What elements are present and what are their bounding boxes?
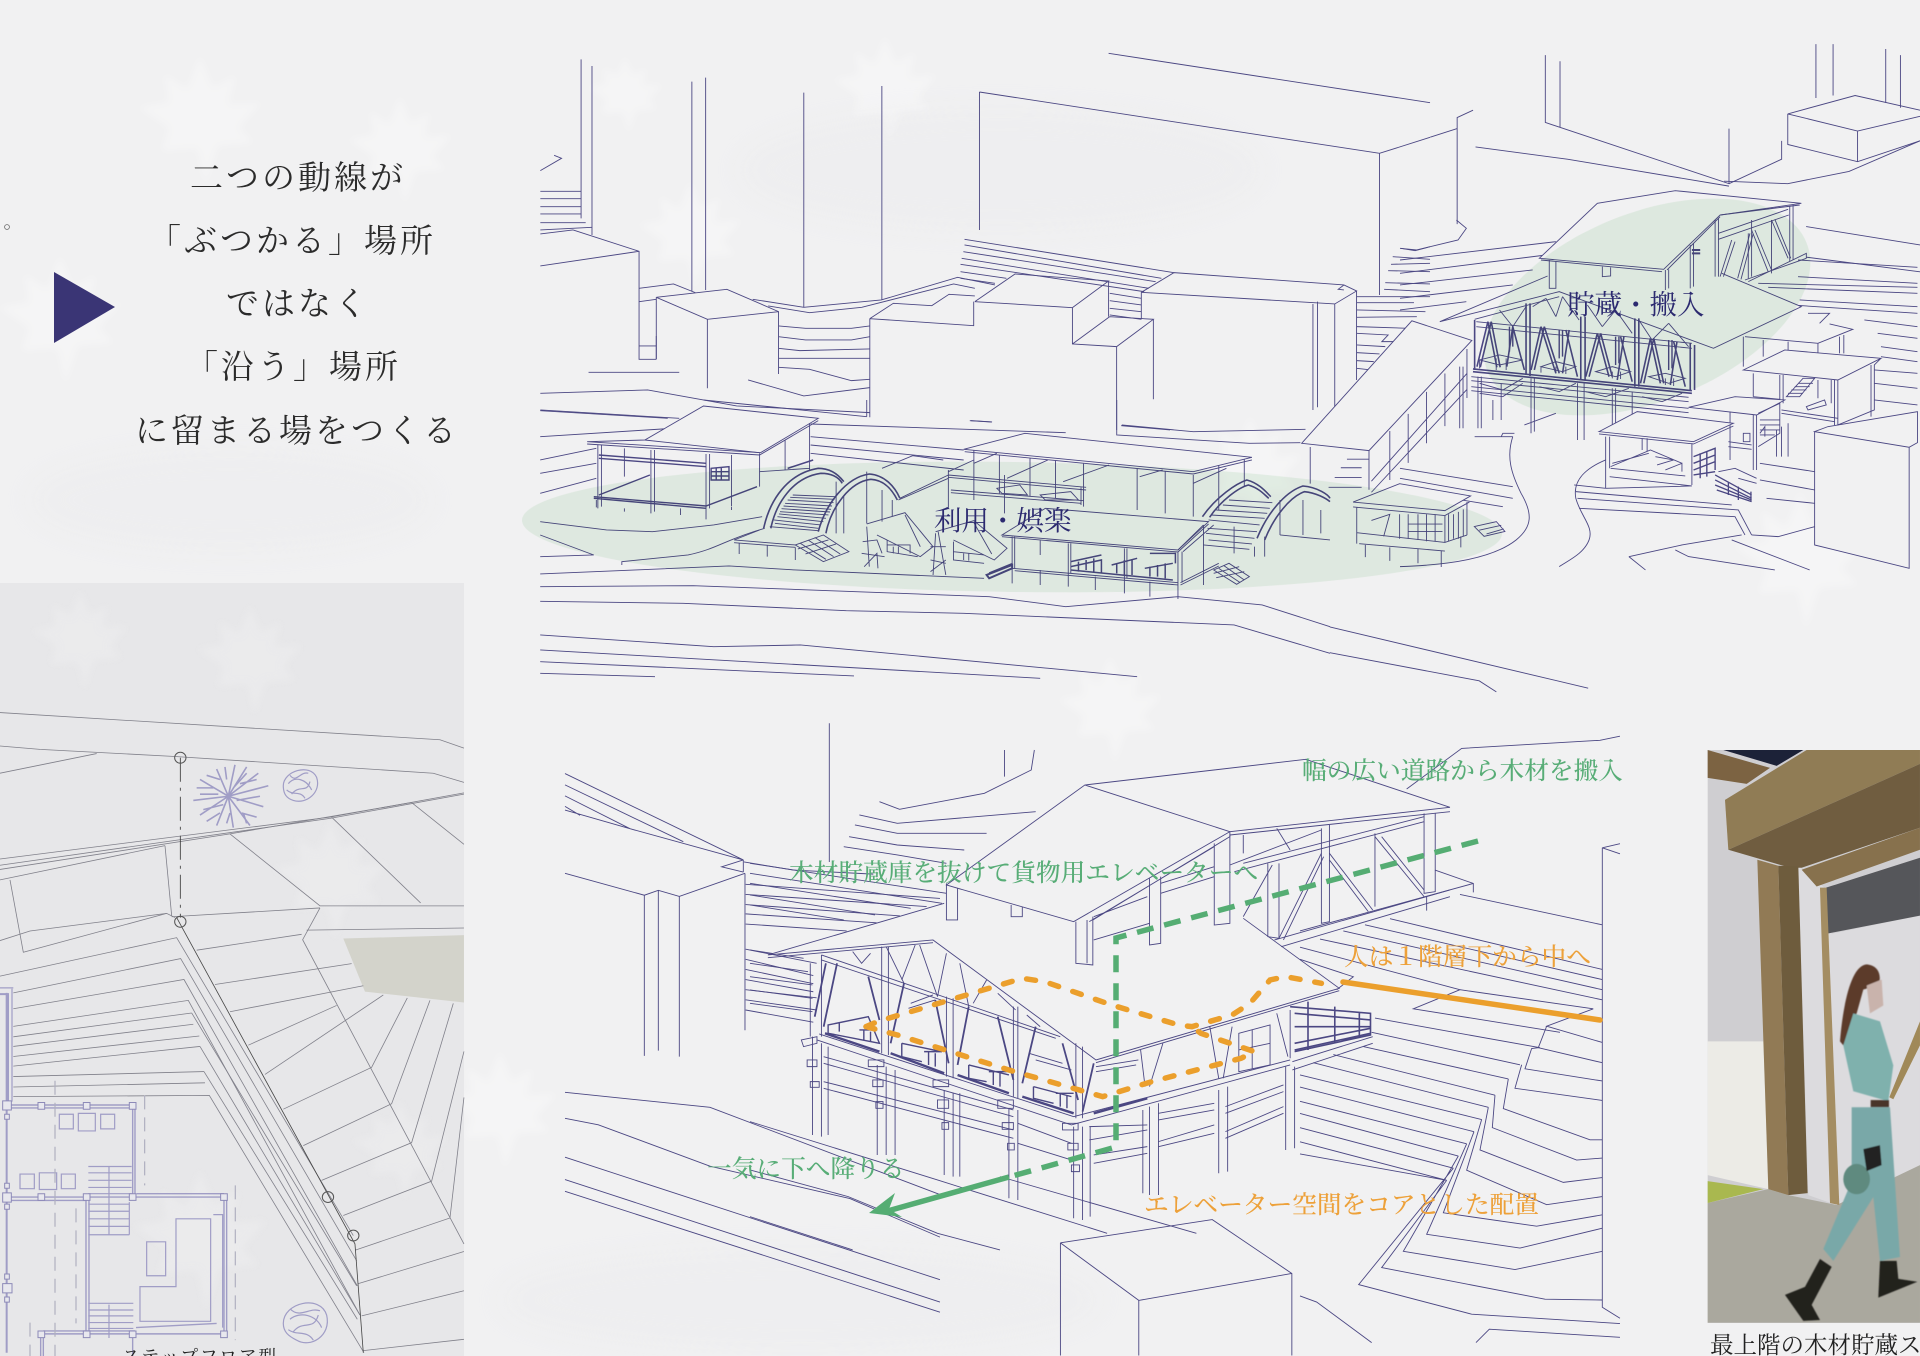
main building bbox=[750, 750, 1450, 1250]
upper structure bbox=[946, 813, 1450, 965]
pavilion: left structure bbox=[587, 421, 818, 519]
title: 「ぶつかる」場所 bbox=[148, 215, 436, 262]
annex: stair block bbox=[1743, 313, 1853, 367]
annotations bbox=[707, 752, 1623, 1221]
plan: tree symbols bbox=[193, 765, 327, 1343]
photo floor bbox=[1708, 1165, 1920, 1323]
title: 「沿う」場所 bbox=[185, 341, 401, 388]
annex: upper room structure bbox=[1753, 365, 1871, 425]
photo lower beam bbox=[1802, 828, 1920, 886]
lower roof structure bbox=[810, 945, 1290, 1118]
axonometric drawing: upper site bbox=[540, 44, 1920, 692]
worker legs bbox=[1823, 1107, 1900, 1261]
annex: lower room bbox=[1599, 412, 1733, 442]
small pavilion walls bbox=[1353, 502, 1505, 567]
lower left context bbox=[565, 723, 940, 1312]
furniture bbox=[825, 995, 1147, 1113]
right bridges bbox=[1202, 480, 1330, 540]
lower roof fill bbox=[768, 903, 1339, 1060]
annotation: wide road: 幅の広い道路から木材を搬入 bbox=[1302, 752, 1623, 787]
pavilion: left roof bbox=[587, 406, 818, 453]
plan leaf texture bbox=[32, 590, 448, 1310]
photo post shade bbox=[1778, 866, 1808, 1195]
photo back wall bbox=[1798, 866, 1920, 1205]
huts bbox=[862, 513, 1007, 575]
photo back beam bbox=[1708, 750, 1770, 784]
upper context buildings bbox=[540, 53, 1430, 430]
worker boots bbox=[1785, 1259, 1832, 1321]
plan: axis markers bbox=[175, 752, 359, 1241]
right bridge stairs bbox=[1203, 500, 1330, 557]
route arrow head bbox=[869, 1193, 902, 1217]
route: people line (orange dashed) bbox=[866, 977, 1321, 1097]
photo big beam underside bbox=[1728, 764, 1920, 868]
balcony railing bbox=[1290, 1002, 1370, 1052]
deck and floors bbox=[812, 1034, 1373, 1220]
label: storage and delivery: 貯蔵・搬入 bbox=[1567, 282, 1704, 322]
photo brace bbox=[1889, 1021, 1920, 1099]
annotation: people entry: 人は１階層下から中へ bbox=[1344, 938, 1591, 973]
timber route arrow bbox=[884, 1177, 1009, 1212]
title: 二つの動線が bbox=[190, 152, 406, 199]
photo dark sky bbox=[1723, 750, 1803, 766]
storage furniture bbox=[1480, 327, 1685, 386]
upper roof detail bbox=[1085, 785, 1450, 837]
photo big beam top bbox=[1725, 750, 1920, 850]
route: timber line (green dashed) bbox=[884, 841, 1478, 1212]
photo shutter bbox=[1826, 858, 1920, 934]
storage thin structure bbox=[1460, 297, 1692, 440]
road edges and terraces bbox=[1400, 220, 1917, 570]
title: ではなく bbox=[226, 278, 370, 325]
upper roof bbox=[946, 759, 1450, 922]
right context bbox=[1330, 44, 1920, 692]
pavilion: right lower structure bbox=[987, 524, 1249, 599]
small pavilion bbox=[1353, 484, 1505, 567]
timber route dashes bbox=[1009, 841, 1478, 1177]
orange lower path bbox=[866, 1027, 1254, 1097]
storage upper roof bbox=[1539, 191, 1801, 269]
bridge stairs bbox=[734, 456, 948, 562]
bridge roof bbox=[1302, 321, 1472, 451]
triangle arrow bbox=[54, 272, 115, 343]
orange upper path bbox=[866, 977, 1321, 1027]
column joints bbox=[801, 1037, 1079, 1172]
annex: middle room structure bbox=[1728, 403, 1788, 470]
plan: contour lines bbox=[0, 713, 464, 1353]
context lines behind building bbox=[750, 750, 1196, 1250]
plan background bbox=[0, 583, 464, 1356]
route: people entry line bbox=[1343, 982, 1600, 1020]
title bbox=[135, 152, 459, 452]
annotation: go down: 一気に下へ降りる bbox=[707, 1150, 905, 1185]
annex: middle room bbox=[1689, 397, 1785, 415]
label: use and leisure: 利用・娯楽 bbox=[934, 498, 1072, 538]
title: に留まる場をつくる bbox=[135, 405, 459, 452]
bridge structure bbox=[1310, 349, 1467, 492]
annex: lower room structure bbox=[1599, 426, 1757, 502]
storage upper roof edge bbox=[1541, 205, 1800, 272]
annex: upper room bbox=[1743, 350, 1881, 425]
storage truss bays bbox=[1473, 303, 1695, 393]
building row: use and leisure bbox=[540, 400, 1330, 678]
lower block bbox=[1060, 1220, 1292, 1356]
axonometric drawing: lower building bbox=[565, 723, 1620, 1356]
plan: column markers bbox=[3, 1101, 227, 1338]
photo walking worker bbox=[1785, 964, 1917, 1321]
photo lawn bbox=[1708, 1181, 1763, 1203]
plan: building outline bbox=[0, 988, 235, 1356]
small pavilion roof bbox=[1353, 484, 1471, 511]
worker face bbox=[1867, 980, 1883, 1013]
photo wall bbox=[1708, 750, 1920, 1323]
annotation: elevator core: エレベーター空間をコアとした配置 bbox=[1144, 1186, 1539, 1221]
photo post bbox=[1757, 860, 1788, 1195]
right context terraces bbox=[1300, 736, 1620, 1343]
worker belt bbox=[1871, 1100, 1889, 1107]
green zone: storage bbox=[1452, 155, 1842, 459]
pavilion: right upper roof bbox=[964, 433, 1252, 472]
worker torso bbox=[1843, 1013, 1893, 1101]
terrain lines bbox=[540, 400, 1330, 678]
panel: site plan bbox=[0, 583, 464, 1356]
photo: top floor timber storage bbox=[1708, 750, 1920, 1323]
plan drawing bbox=[0, 713, 464, 1356]
green zone: use and leisure bbox=[521, 455, 1503, 599]
photo lower wall bbox=[1708, 1041, 1768, 1189]
storage lower roof fill bbox=[1440, 273, 1801, 348]
storage lower roof edges bbox=[1440, 273, 1801, 348]
right box bbox=[1815, 412, 1917, 568]
pavilion: right lower roof bbox=[1002, 508, 1209, 550]
bridge arches bbox=[764, 460, 900, 533]
annotation: through storage: 木材貯蔵庫を抜けて貨物用エレベーターへ bbox=[789, 854, 1258, 889]
worker hair bbox=[1840, 964, 1880, 1045]
pavilion: right upper structure bbox=[948, 450, 1252, 517]
building: storage and delivery bbox=[1400, 191, 1917, 570]
photo second post bbox=[1820, 888, 1839, 1205]
plan: paved area bbox=[343, 935, 464, 1003]
lower roof edges bbox=[768, 903, 1339, 1063]
small ring mark bbox=[5, 225, 9, 229]
storage upper truss bbox=[1549, 205, 1806, 290]
worker bag bbox=[1843, 1164, 1870, 1194]
